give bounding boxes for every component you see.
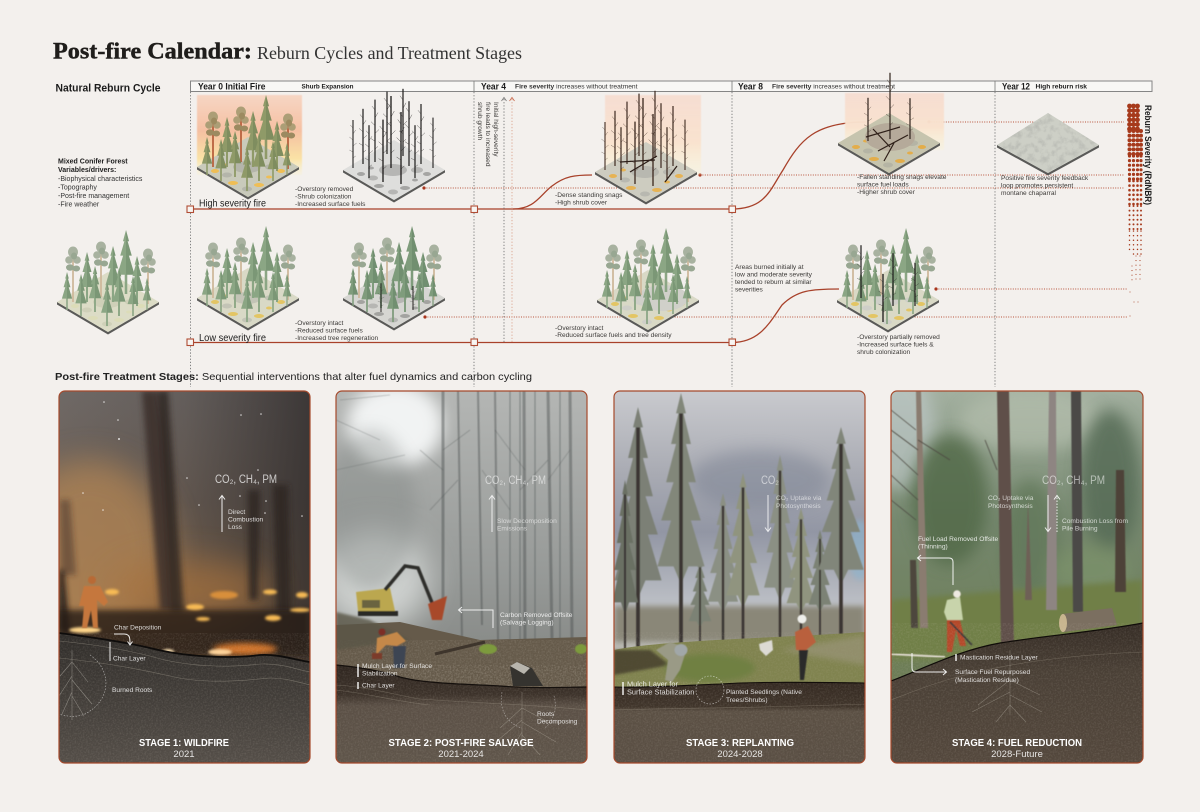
labels: soil layers: Mulch Layer for Surface [362, 663, 432, 670]
text: low severity note: Areas burned initially at [735, 264, 804, 271]
title: Reburn Cycles and Treatment Stages [257, 43, 522, 63]
stage 3 caption [686, 737, 794, 760]
labels: soil layers: Char Layer [362, 682, 395, 690]
timeline header bar: Fire severity increases without treatment [772, 84, 895, 90]
text: forest variables: -Post-fire management [58, 193, 129, 200]
text: forest variables: Variables/drivers: [58, 167, 116, 174]
labels: emissions: CO₂, CH₄, PM [485, 475, 546, 487]
timeline header bar: Year 8 [738, 82, 763, 92]
dotted reburn links [422, 120, 1128, 319]
stage 1 caption: STAGE 1: WILDFIRE [139, 737, 229, 749]
labels: carbon uptake: Photosynthesis [776, 503, 821, 510]
timeline header bar [190, 81, 1152, 92]
labels: soil layers: (Mastication Residue) [955, 677, 1019, 684]
photo figure: firefighter [79, 576, 108, 628]
timeline header bar: Year 0 Initial Fire [198, 82, 266, 92]
legend: reburn severity dots: Reburn Severity (RdNBR) [1142, 105, 1153, 205]
labels: fuel removal: (Thinning) [918, 544, 948, 550]
text: year 4 low outcomes: -Overstory intact [555, 325, 604, 332]
icon: baseline mixed conifer forest block [57, 230, 159, 334]
labels: soil layers: Planted Seedlings (Native [726, 689, 802, 696]
labels: emissions: Carbon Removed Offsite [500, 612, 573, 619]
timeline header bar: High reburn risk [1036, 84, 1087, 91]
labels: emissions [458, 475, 573, 628]
icon: low severity fire block [197, 226, 299, 330]
section heading: treatment stages: Post-fire Treatment Stages: Sequential interventions that alter fuel dynamics and carbon cycling [55, 371, 532, 383]
icon: year 12 chaparral block [997, 113, 1099, 176]
timeline header bar: Year 12 [1002, 82, 1030, 92]
text: low severity note: low and moderate severity [735, 272, 813, 278]
icon: burned snags block [343, 89, 445, 202]
text: year 4 high outcomes: -High shrub cover [555, 200, 608, 206]
stage 1 caption [139, 737, 229, 760]
text: year 8 high outcomes: surface fuel loads [857, 182, 909, 188]
text: year 0 high outcomes: -Shrub colonization [295, 194, 352, 200]
icon: low severity regrowth block [343, 226, 445, 330]
photo figure: logger [372, 628, 406, 668]
text: year 8 low outcomes: -Overstory partially removed [857, 334, 940, 341]
labels: carbon fluxes: Photosynthesis [988, 503, 1033, 510]
text: year 8 low outcomes: shrub colonization [857, 349, 910, 356]
text: year 0 high outcomes: -Increased surface fuels [295, 201, 366, 208]
arrows: feedback up to year 4 [502, 98, 514, 342]
labels: soil layers: Burned Roots [112, 687, 153, 694]
labels: fuel removal [918, 536, 998, 585]
text: year 8 low outcomes: -Increased surface fuels & [857, 342, 934, 348]
icon: year 4 low severity block [597, 228, 699, 332]
text: year 8 low outcomes [857, 334, 940, 356]
labels: emissions: (Salvage Logging) [500, 620, 554, 626]
stage 3 caption: 2024-2028 [717, 749, 763, 760]
soil cross-section [59, 633, 310, 763]
timeline guide lines [190, 92, 995, 387]
text: low severity fire label: Low severity fire [199, 333, 266, 344]
arrow: low severity trajectory [190, 289, 839, 342]
icon: high severity fire block [197, 95, 302, 200]
timeline header bar: Year 4 [481, 82, 506, 92]
labels: soil layers: Trees/Shrubs) [726, 697, 768, 704]
soil cross-section [336, 662, 587, 763]
labels: soil layers: Mastication Residue Layer [960, 654, 1039, 662]
soil cross-section [891, 623, 1143, 763]
panel: stage 4 fuel reduction [890, 390, 1144, 764]
text: year 0 high outcomes: -Overstory removed [295, 186, 354, 193]
stage 1 caption: 2021 [173, 749, 195, 760]
text: year 4 high outcomes: -Dense standing snags [555, 192, 623, 199]
labels: emissions: Combustion [228, 516, 264, 524]
text: year 12 feedback: loop promotes persistent [1001, 182, 1073, 190]
text: high severity fire label: High severity fire [199, 198, 266, 210]
text: low severity note: tended to reburn at similar [735, 279, 812, 286]
text: year 0 low outcomes: -Reduced surface fuels [295, 328, 364, 334]
labels: soil layers: Surface Stabilization [627, 688, 694, 696]
labels: carbon fluxes: CO₂, CH₄, PM [1042, 475, 1105, 487]
text: year 0 low outcomes [295, 320, 379, 342]
timeline header bar: Shurb Expansion [302, 84, 354, 91]
note: initial high severity: fire leads to increased [484, 102, 491, 167]
labels: emissions [215, 474, 277, 532]
title [53, 38, 522, 64]
labels: emissions: Direct [228, 509, 245, 516]
labels: emissions: Loss [228, 524, 243, 531]
text: year 8 high outcomes [857, 174, 947, 196]
stage 4 caption: STAGE 4: FUEL REDUCTION [952, 737, 1082, 749]
labels: carbon uptake: CO₂ [761, 475, 779, 487]
text: forest variables [58, 158, 143, 208]
photo element: cut log [1059, 608, 1117, 632]
labels: fuel removal: Fuel Load Removed Offsite [918, 536, 998, 543]
text: year 12 feedback: montane chaparral [1001, 190, 1057, 197]
text: year 12 feedback: Positive fire severity feedback [1001, 175, 1089, 182]
photo element: excavator [356, 566, 447, 620]
labels: carbon fluxes: CO₂ Uptake via [988, 495, 1034, 502]
labels: soil layers: Char Layer [113, 656, 146, 662]
text: low severity note [735, 264, 813, 294]
text: year 12 feedback [1001, 175, 1089, 197]
labels: carbon uptake: CO₂ Uptake via [776, 495, 822, 502]
text: forest variables: -Fire weather [58, 202, 100, 208]
timeline header bar: Fire severity increases without treatment [515, 84, 638, 90]
photo figure: sawyer [944, 590, 972, 652]
text: year 4 high outcomes [555, 192, 623, 206]
text: year 0 high outcomes [295, 186, 366, 208]
panel: stage 1 wildfire [58, 390, 311, 764]
labels: soil layers: Stabilization [362, 670, 398, 678]
text: year 4 low outcomes [555, 325, 672, 339]
title: Post-fire Calendar: [53, 38, 252, 64]
stage 4 caption: 2028-Future [991, 749, 1043, 760]
labels: soil layers: Char Deposition [114, 624, 162, 632]
text: year 0 low outcomes: -Overstory intact [295, 320, 344, 327]
stage 2 caption [388, 737, 534, 760]
section heading: natural reburn cycle: Natural Reburn Cycle [56, 82, 160, 94]
labels: soil layers [358, 663, 578, 726]
soil cross-section [614, 682, 865, 763]
legend: reburn severity dots [1130, 105, 1153, 320]
icon: year 8 low severity block [837, 228, 939, 332]
burned roots [59, 650, 106, 720]
labels: soil layers: Decomposing [537, 718, 578, 726]
labels: emissions: CO₂, CH₄, PM [215, 474, 277, 486]
labels: emissions: Slow Decomposition [497, 518, 557, 525]
stage 3 caption: STAGE 3: REPLANTING [686, 737, 794, 749]
panel: stage 3 replanting [612, 391, 872, 763]
text: year 4 low outcomes: -Reduced surface fuels and tree density [555, 332, 672, 339]
stage 4 caption [952, 737, 1082, 760]
labels: soil layers [110, 624, 162, 694]
arrow: high severity trajectory [190, 122, 866, 209]
text: year 8 high outcomes: -Fallen standing snags elevate [857, 174, 947, 181]
text: year 0 low outcomes: -Increased tree regeneration [295, 335, 379, 342]
photo figures: planting crew [656, 614, 816, 682]
labels: soil layers [623, 676, 802, 704]
labels: soil layers: Mulch Layer for [627, 680, 678, 688]
text: forest variables: -Biophysical characteristics [58, 176, 143, 183]
labels: soil layers: Roots [537, 711, 555, 718]
icon: year 8 high severity block [838, 73, 944, 176]
labels: emissions: Emissions [497, 526, 528, 532]
labels: soil layers [912, 653, 1039, 684]
note: initial high severity: shrub growth [476, 102, 483, 140]
text: forest variables: -Topography [58, 184, 97, 192]
stage 2 caption: 2021-2024 [438, 749, 484, 760]
icon: year 4 high severity block [595, 91, 701, 204]
decomposing roots [492, 692, 556, 755]
text: forest variables: Mixed Conifer Forest [58, 158, 128, 166]
labels: carbon fluxes: Pile Burning [1062, 526, 1098, 532]
labels: carbon fluxes: Combustion Loss from [1062, 518, 1128, 525]
labels: carbon fluxes [988, 475, 1128, 532]
timeline markers [187, 206, 736, 346]
note: initial high severity: Initial high-severity [492, 102, 499, 157]
labels: carbon uptake [761, 475, 822, 532]
text: year 8 high outcomes: -Higher shrub cover [857, 189, 916, 196]
note: initial high severity [476, 102, 499, 167]
panel: stage 2 salvage [320, 383, 587, 763]
stage 2 caption: STAGE 2: POST-FIRE SALVAGE [388, 737, 534, 749]
text: low severity note: severities [735, 286, 764, 294]
labels: soil layers: Surface Fuel Repurposed [955, 669, 1030, 676]
